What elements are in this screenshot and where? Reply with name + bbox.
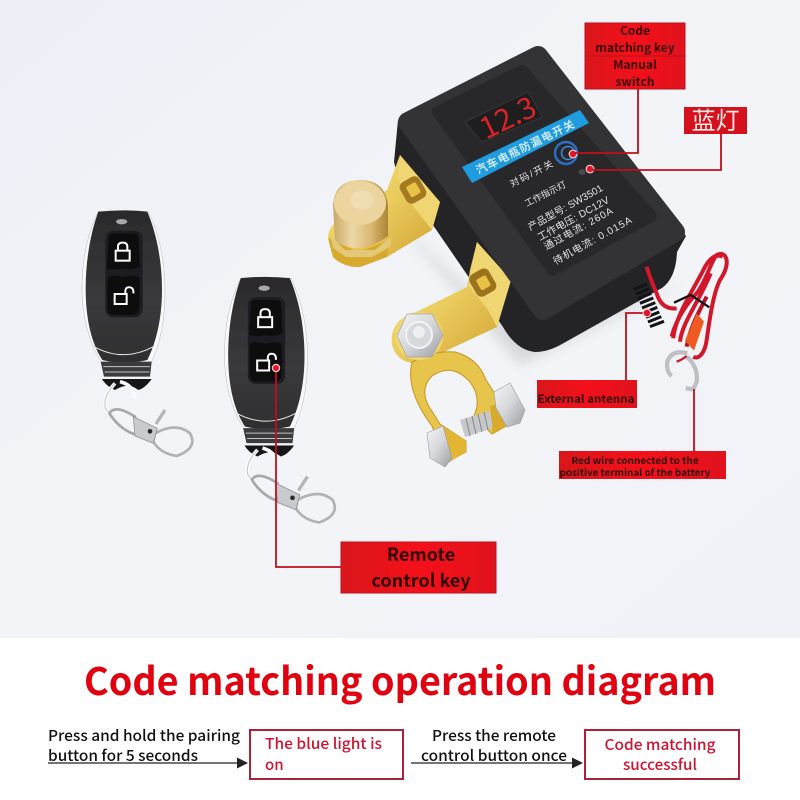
band text: 汽车电瓶防漏电开关 <box>473 117 577 177</box>
threaded bolt <box>460 411 493 437</box>
bolt nut <box>397 174 429 206</box>
battery switch product <box>328 56 727 467</box>
device spec text: 待机电流: 0.015A <box>551 213 634 267</box>
step 1 instruction <box>48 725 240 766</box>
indicator light <box>578 165 594 175</box>
step 1 instruction: Press and hold the pairing <box>48 725 240 746</box>
remote control left <box>82 210 192 456</box>
device top face <box>408 56 675 310</box>
step 2 box: The blue light is <box>265 733 382 754</box>
label: manual switch <box>585 56 685 90</box>
remote control right <box>224 277 335 522</box>
device panel <box>438 71 651 270</box>
label: red wire <box>559 451 726 479</box>
device spec text: 工作指示灯 <box>523 178 568 209</box>
orange heat shrink <box>685 313 704 351</box>
bolt nut <box>467 266 499 299</box>
photo background <box>0 0 800 638</box>
label: code matching key: matching key <box>595 39 675 56</box>
step 3 instruction: control button once <box>421 745 567 766</box>
antenna spring <box>634 284 664 327</box>
arrow 2 <box>411 758 583 768</box>
step 2 box: on <box>265 754 284 775</box>
shadow under device <box>395 220 680 365</box>
clamp ring <box>411 352 508 462</box>
step 3 instruction: Press the remote <box>432 725 556 746</box>
step 4 box: successful <box>623 754 697 775</box>
label: remote control key: control key <box>371 567 471 593</box>
device spec text: 产品型号: SW3501 <box>525 181 606 233</box>
device spec text: 对码/开关 <box>508 158 555 189</box>
label: red wire: Red wire connected to the <box>572 453 699 467</box>
label: code matching key <box>585 22 685 56</box>
step 2 box <box>250 730 403 779</box>
bottom white panel <box>0 638 800 800</box>
callout lines <box>276 89 721 567</box>
pairing button <box>555 142 577 164</box>
digital display <box>465 83 543 148</box>
blue title band <box>462 110 589 183</box>
title: Code matching operation diagram <box>84 651 716 706</box>
step 4 box <box>585 730 739 779</box>
step 3 instruction <box>421 725 567 766</box>
red wire bundle <box>647 254 727 358</box>
label: manual switch: Manual <box>613 56 657 73</box>
device spec text: 工作电压: DC12V <box>535 193 612 244</box>
wires and terminal <box>634 254 727 389</box>
lower gold bracket with battery clamp <box>392 242 525 467</box>
device side <box>394 60 686 352</box>
label: external antenna: External antenna <box>538 391 634 407</box>
device spec text: 通过电流: 260A <box>541 204 615 253</box>
top gold bracket with cap <box>328 155 440 267</box>
label: remote control key: Remote <box>387 541 455 567</box>
display reading: 12.3 <box>471 83 543 148</box>
step 4 box: Code matching <box>604 734 716 755</box>
ring terminal <box>667 352 697 389</box>
device spec text <box>508 158 634 267</box>
label: manual switch: switch <box>616 73 654 90</box>
label: code matching key: Code <box>620 22 650 39</box>
label: blue light: 蓝灯 <box>692 108 740 135</box>
label: red wire: positive terminal of the battery <box>560 465 711 479</box>
callout dots <box>272 309 651 372</box>
label: remote control key <box>341 541 496 593</box>
step 1 instruction: button for 5 seconds <box>48 745 198 766</box>
cable tie <box>674 295 709 307</box>
label: external antenna <box>537 380 637 408</box>
arrow 1 <box>48 758 248 768</box>
